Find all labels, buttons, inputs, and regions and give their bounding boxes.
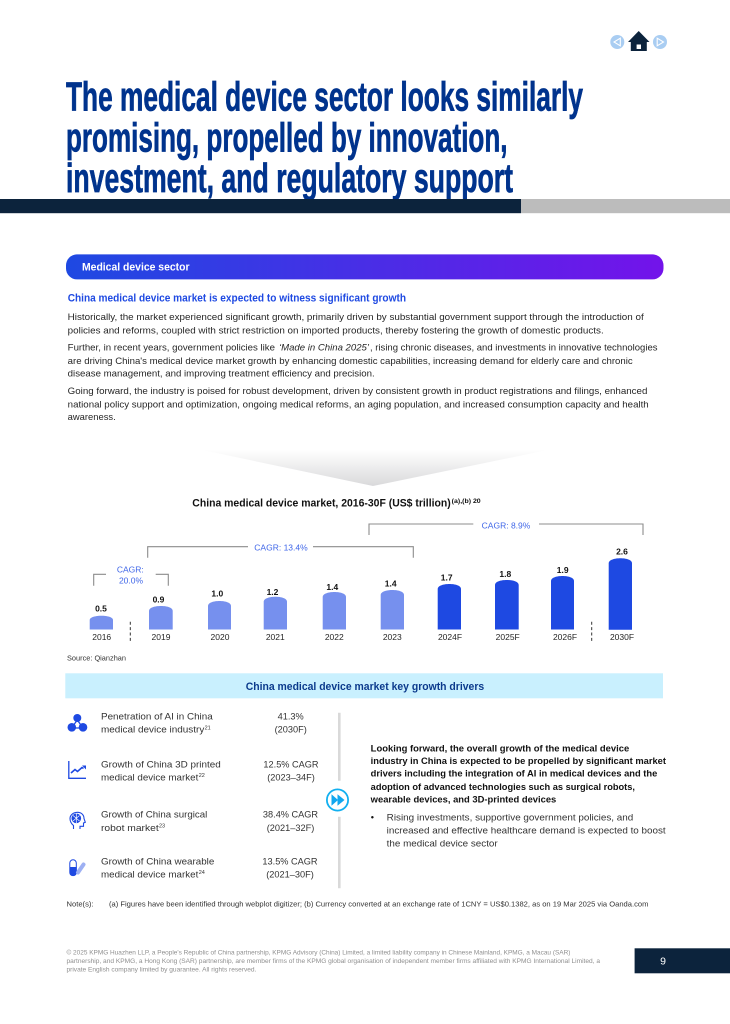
arrow: gradient down triangle: [202, 450, 548, 486]
takeaway bold paragraph: adoption of advanced technologies such as surgical robots,: [371, 782, 635, 792]
chart title: (a),(b) 20: [452, 498, 481, 505]
year axis labels: 2020: [211, 632, 230, 642]
navigation icons: [610, 31, 667, 51]
year axis labels: 2025F: [496, 632, 520, 642]
year axis labels: 2016: [92, 632, 111, 642]
takeaway bold paragraph: [370, 744, 666, 805]
paragraph 3: national policy support and optimization, ongoing medical reforms, an aging population, and increased consumption capacity and health: [68, 399, 649, 409]
paragraph 3: Going forward, the industry is poised for robust development, driven by consistent growth in product registrations and filings, enhanced: [68, 386, 647, 396]
takeaway bold paragraph: industry in China is expected to be propelled by significant market: [371, 756, 666, 766]
takeaway bold paragraph: wearable devices, and 3D-printed devices: [370, 795, 556, 805]
chart title: China medical device market, 2016-30F (US$ trillion): [192, 498, 451, 510]
year axis labels: 2030F: [610, 632, 634, 642]
driver row: surgical robots: (2021–32F): [267, 823, 314, 833]
driver row: wearable devices: (2021–30F): [266, 869, 314, 879]
bar values: [95, 547, 628, 614]
panel heading band: [65, 673, 663, 698]
driver row: 3D printed devices: 12.5% CAGR: [263, 759, 319, 769]
year axis labels: 2021: [266, 632, 285, 642]
bracket: CAGR 20.0%: [94, 565, 168, 586]
year axis labels: [92, 632, 634, 642]
year axis labels: 2026F: [553, 632, 577, 642]
driver row: AI penetration: 41.3%: [278, 712, 304, 722]
driver row: surgical robots: robot market: [101, 823, 159, 833]
bracket: CAGR 8.9%: CAGR: 8.9%: [482, 520, 531, 530]
notes: Note(s):: [66, 900, 94, 909]
driver row: wearable devices: Growth of China wearable: [101, 856, 214, 866]
driver row: wearable devices: 24: [199, 870, 205, 876]
icon: capsules: [70, 860, 84, 876]
takeaway bullet: the medical device sector: [387, 838, 498, 848]
driver row: 3D printed devices: medical device market: [101, 772, 199, 782]
paragraph 3: [68, 386, 649, 422]
takeaway bullet: Rising investments, supportive government policies, and: [387, 813, 633, 823]
year axis labels: 2024F: [438, 632, 462, 642]
driver row: AI penetration: 21: [205, 726, 211, 732]
page number: 9: [660, 956, 666, 968]
panel heading band: China medical device market key growth drivers: [246, 681, 484, 693]
bar values: 1.4: [385, 579, 397, 589]
paragraph 2: , rising chronic diseases, and investments in innovative technologies: [370, 343, 658, 353]
bracket: CAGR 20.0%: CAGR:: [117, 565, 144, 575]
driver row: surgical robots: Growth of China surgical: [101, 810, 207, 820]
takeaway bold paragraph: drivers including the integration of AI in medical devices and the: [371, 769, 657, 779]
bar values: 2.6: [616, 547, 628, 557]
driver row: 3D printed devices: 22: [199, 773, 205, 779]
bar values: 1.4: [326, 582, 338, 592]
driver row: 3D printed devices: Growth of China 3D printed: [101, 759, 221, 769]
bar values: 1.8: [499, 569, 511, 579]
copyright footer: private English company limited by guarantee. All rights reserved.: [66, 966, 257, 973]
icon: next page: [653, 35, 667, 49]
driver row: surgical robots: 23: [159, 824, 165, 830]
chart source: Source: Qianzhan: [67, 653, 126, 662]
driver row: 3D printed devices: (2023–34F): [267, 772, 315, 782]
paragraph 2: ‘Made in China 2025’: [279, 343, 370, 353]
bar values: 1.7: [441, 573, 453, 583]
year axis labels: 2023: [383, 632, 402, 642]
takeaway text: [370, 744, 666, 848]
paragraph 2: disease management, and improving treatment efficiency and precision.: [68, 368, 375, 378]
driver row: surgical robots: [70, 810, 318, 833]
paragraph 2: are driving China's medical device market growth by enhancing domestic capabilities, increasing demand for elderly care and chronic: [68, 356, 633, 366]
copyright footer: © 2025 KPMG Huazhen LLP, a People's Republic of China partnership, KPMG Advisory (China) Limited, a limited liability company in Chinese Mainland, KPMG, a Macau (SAR): [66, 950, 570, 957]
chart: China medical device market: [67, 498, 643, 662]
bars forecast: [438, 558, 632, 630]
page number: [635, 948, 730, 973]
year axis labels: 2022: [325, 632, 344, 642]
driver row: AI penetration: (2030F): [275, 725, 307, 735]
paragraph 1: policies and reforms, coupled with strict restriction on imported products, thereby fostering the growth of domestic products.: [68, 325, 604, 335]
driver row: wearable devices: 13.5% CAGR: [262, 856, 318, 866]
notes: (a) Figures have been identified through webplot digitizer; (b) Currency converted at an exchange rate of 1CNY = US$0.1382, as on 19 Mar 2025 via Oanda.com: [109, 900, 648, 909]
driver row: wearable devices: medical device market: [101, 869, 199, 879]
paragraph 2: Further, in recent years, government policies like: [68, 343, 275, 353]
section pill: medical device sector: Medical device sector: [82, 262, 190, 274]
driver row: 3D printed devices: [69, 759, 319, 782]
copyright footer: partnership, and KPMG, a Hong Kong (SAR) partnership, are member firms of the KPMG global organisation of independent member firms affiliated with KPMG International Limited, a: [66, 958, 601, 965]
icon: home: [628, 31, 650, 51]
intro text block: [68, 293, 658, 422]
bar values: 0.9: [153, 595, 165, 605]
bar values: 1.2: [267, 587, 279, 597]
takeaway bullet: •: [371, 813, 374, 823]
driver row: AI penetration: Penetration of AI in China: [101, 712, 214, 722]
driver row: surgical robots: 38.4% CAGR: [263, 810, 318, 820]
takeaway bullet: increased and effective healthcare demand is expected to boost: [387, 826, 666, 836]
paragraph 2: [68, 343, 658, 378]
paragraph 1: [68, 312, 644, 335]
takeaway bullet: [371, 813, 666, 848]
paragraph 1: Historically, the market experienced significant growth, primarily driven by substantial government support through the introduction of: [68, 312, 644, 322]
year axis labels: 2019: [152, 632, 171, 642]
bar values: 0.5: [95, 604, 107, 614]
icon: head with brain: [70, 812, 85, 829]
title: [66, 74, 583, 201]
bar values: 1.0: [211, 589, 223, 599]
driver row: AI penetration: medical device industry: [101, 725, 205, 735]
icon: previous page: [610, 35, 624, 49]
section pill: medical device sector: [66, 254, 664, 279]
driver row: AI penetration: [68, 712, 307, 735]
bracket: CAGR 13.4%: [148, 542, 413, 558]
driver row: wearable devices: [70, 856, 318, 879]
copyright footer: [66, 950, 601, 973]
takeaway bold paragraph: Looking forward, the overall growth of the medical device: [371, 744, 629, 754]
bracket: CAGR 8.9%: [369, 520, 643, 535]
paragraph 3: awareness.: [68, 412, 116, 422]
bar values: 1.9: [557, 565, 569, 575]
bracket: CAGR 20.0%: 20.0%: [119, 576, 143, 586]
title rule: [0, 199, 730, 213]
panel: key growth drivers: [65, 673, 666, 888]
bracket: CAGR 13.4%: CAGR: 13.4%: [254, 542, 308, 552]
bars historical: [90, 590, 404, 630]
icon: AI network: [68, 714, 87, 732]
intro heading: China medical device market is expected to witness significant growth: [68, 293, 406, 305]
icon: fast-forward arrow: [327, 789, 348, 811]
icon: growth chart: [69, 761, 86, 778]
